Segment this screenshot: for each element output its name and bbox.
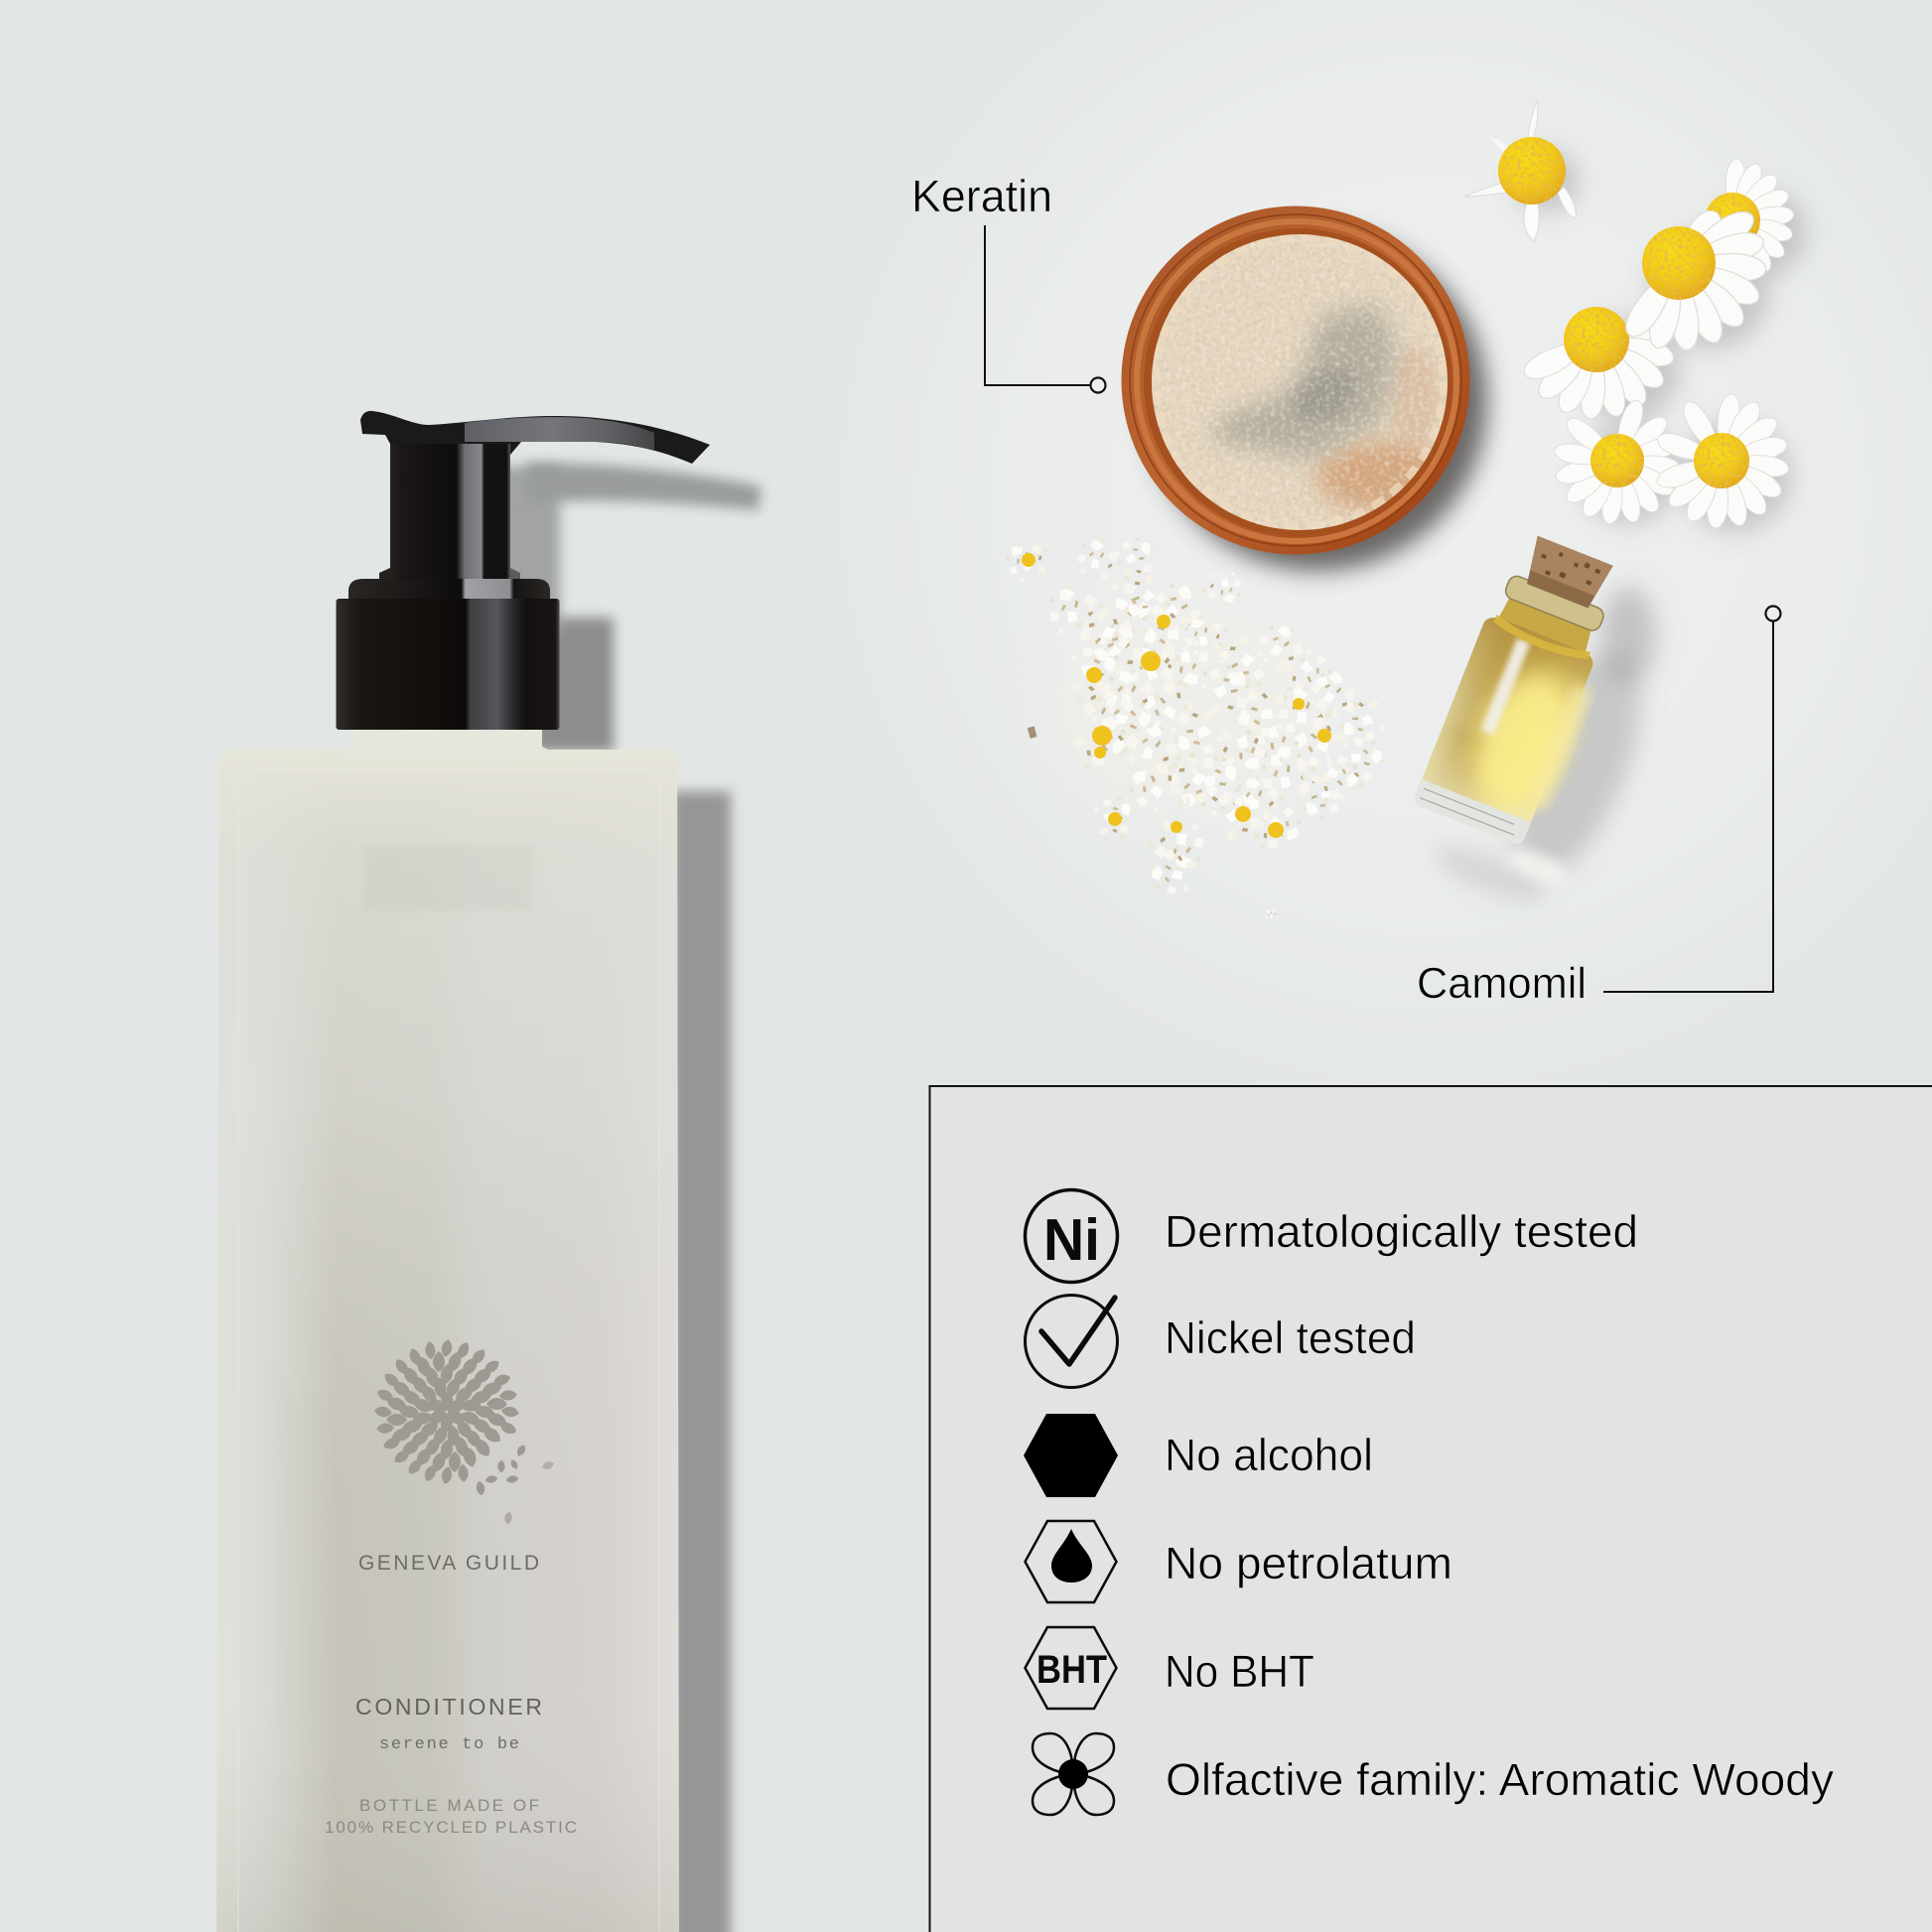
icon: check circle [1025,1295,1118,1388]
oil bottle reflection [1502,842,1572,892]
neck glass [1499,596,1594,652]
base glass [1412,779,1531,847]
icon: hexagon with drop [1025,1521,1116,1602]
text: no bht: No BHT [1165,1646,1314,1697]
label: product name: CONDITIONER [355,1694,542,1720]
chamomile flower: top single [1464,99,1576,241]
top shading and lower fade [1413,614,1596,847]
bottle inner highlights [238,769,659,1932]
panel: product bottle [216,411,761,1932]
icon: BHT hexagon [1025,1627,1116,1709]
label: tagline: serene to be [379,1735,519,1754]
label: recycled note line 2: 100% RECYCLED PLASTIC [325,1818,577,1837]
chamomile flower: bottom right [1654,392,1790,529]
soft photo backdrop [794,0,1932,1132]
shoulder band [1491,615,1590,666]
cork [1520,536,1613,611]
text: olfactive family: Olfactive family: Aromatic Woody [1166,1754,1835,1805]
nozzle highlight [465,417,654,451]
pump stem [379,444,520,579]
text: no alcohol: No alcohol [1165,1430,1373,1480]
callout: camomil [1417,606,1781,1008]
bottle neck [347,730,548,757]
text: no petrolatum: No petrolatum [1165,1538,1452,1588]
bottle rim [1503,574,1606,633]
camomile oil bottle [1412,529,1638,850]
label: recycled note line 1: BOTTLE MADE OF [359,1796,539,1815]
label: brand name: GENEVA GUILD [358,1552,539,1575]
callout: keratin: Keratin [911,171,1052,221]
callout: keratin [911,171,1106,393]
panel: ingredients photo [1007,99,1806,921]
pump actuator nozzle [360,411,710,464]
oil bottle shadow [1428,586,1667,910]
text: nickel tested: Nickel tested [1165,1312,1416,1363]
panel: product claims [929,1086,1932,1932]
bottle body [216,750,679,1932]
icon: nickel circle: Ni [1043,1207,1100,1273]
chamomile flower: back right [1705,158,1795,276]
icon: BHT hexagon: BHT [1036,1648,1107,1692]
chamomile flower: bottom left [1553,397,1682,525]
chamomile flower: large [1618,205,1767,351]
bowl shadow [1148,231,1487,571]
text: dermatologically tested: Dermatologically tested [1165,1206,1638,1257]
oil glow [1457,660,1589,821]
dried chamomile scatter [1007,532,1391,921]
icon: nickel circle [1025,1189,1118,1283]
icon: solid hexagon [1024,1414,1118,1497]
glass body [1413,614,1596,847]
claims panel background [929,1086,1932,1932]
base glass lines [1420,788,1518,835]
icon: four-petal flower [1033,1733,1114,1815]
keratin powder [1152,234,1448,530]
chamomile flower: centre left [1520,307,1677,420]
bottle cast shadow [494,463,761,1932]
pump collar [348,579,550,599]
keratin bowl [1122,207,1469,554]
pump cap [336,599,560,730]
label: logo [373,1338,556,1525]
right edge glow [1527,684,1592,811]
callout: camomil: Camomil [1417,959,1587,1008]
flower shadows [1515,149,1806,532]
glass highlight [1481,637,1530,735]
